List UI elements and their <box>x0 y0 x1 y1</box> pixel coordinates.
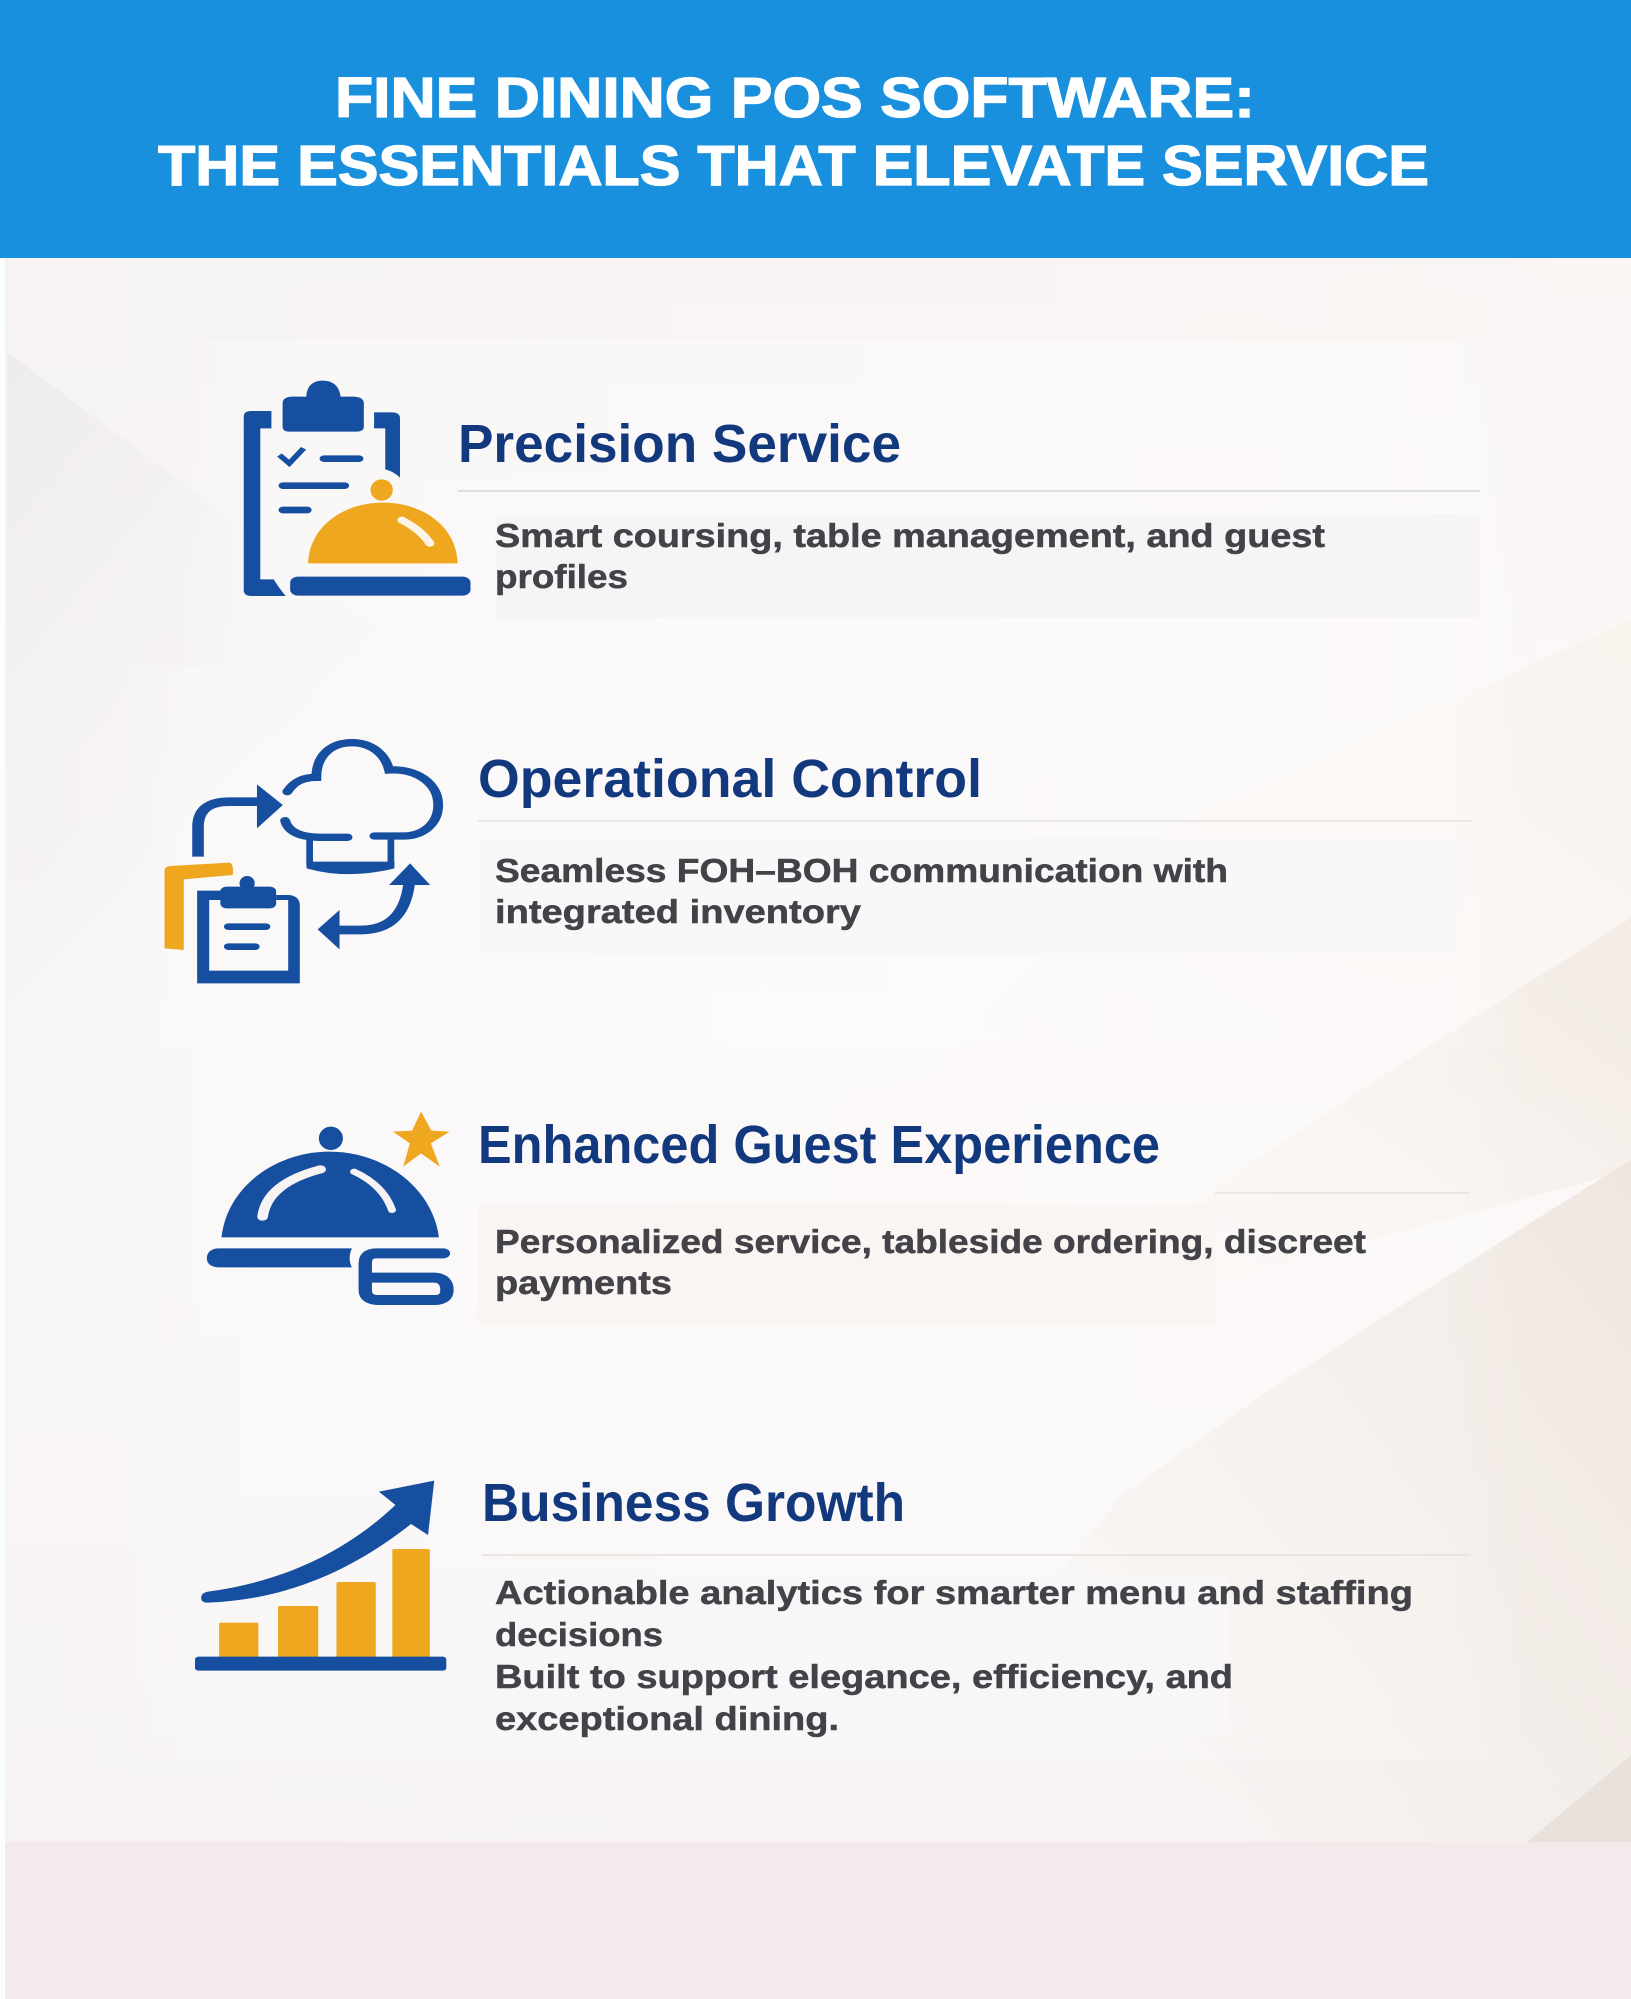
text block: Smart coursing, table management, and guest <box>495 517 1325 554</box>
text block <box>478 1574 1413 1737</box>
text block <box>478 835 1462 956</box>
text block <box>478 1205 1366 1326</box>
title <box>158 66 1429 198</box>
text block: payments <box>495 1264 672 1301</box>
text block: Built to support elegance, efficiency, and <box>495 1658 1233 1695</box>
panel: operational control <box>110 666 1530 1046</box>
heading: Enhanced Guest Experience <box>478 1115 1160 1175</box>
icon: clipboard and cloche <box>244 381 471 596</box>
footer band <box>5 1842 1631 1999</box>
panel: enhanced guest experience <box>110 1046 1530 1403</box>
heading: Operational Control <box>478 749 982 809</box>
title: THE ESSENTIALS THAT ELEVATE SERVICE <box>158 134 1429 198</box>
title: FINE DINING POS SOFTWARE: <box>335 66 1255 130</box>
panel: precision service <box>170 340 1530 666</box>
text block: profiles <box>495 558 628 595</box>
text block: integrated inventory <box>495 893 862 930</box>
text block: Personalized service, tableside ordering, discreet <box>495 1223 1366 1260</box>
panel: business growth <box>110 1403 1530 1760</box>
text block: decisions <box>495 1616 663 1653</box>
icon: chef hat workflow <box>165 743 438 983</box>
text block: Seamless FOH–BOH communication with <box>495 852 1228 889</box>
header banner <box>0 0 1631 258</box>
icon: cloche with star <box>207 1112 450 1300</box>
text block: Actionable analytics for smarter menu and staffing <box>495 1574 1413 1611</box>
icon: growth chart <box>195 1481 446 1671</box>
heading: Business Growth <box>482 1473 905 1533</box>
text block <box>495 514 1479 618</box>
heading: Precision Service <box>458 414 901 474</box>
text block: exceptional dining. <box>495 1700 839 1737</box>
